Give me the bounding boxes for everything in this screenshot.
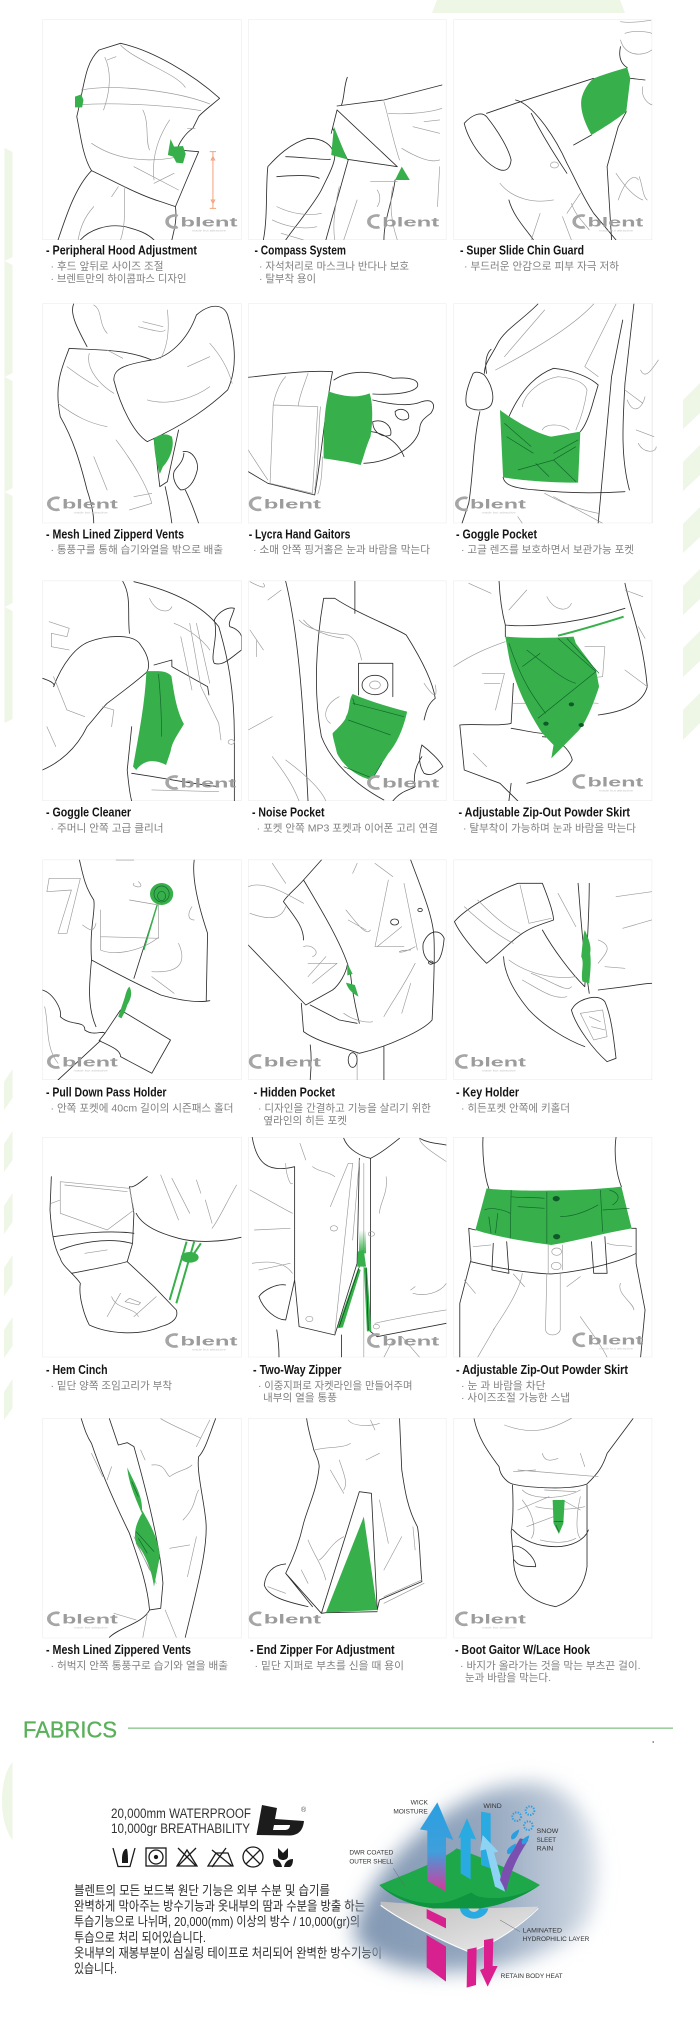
lower magenta bands (427, 1935, 446, 1982)
arrow: wind (481, 1812, 491, 1868)
diagram labels: HYDROPHILIC LAYER (523, 1936, 590, 1943)
panel: Compass System (248, 19, 446, 285)
logo: blent (369, 776, 439, 791)
illustration: hem cinch (42, 1137, 242, 1357)
illustration: noise pocket (248, 581, 446, 801)
description: · 주머니 안쪽 고급 클리너 (50, 822, 164, 834)
diagram labels: SLEET (537, 1837, 556, 1844)
description (460, 1659, 641, 1684)
heading: - Adjustable Zip-Out Powder Skirt (458, 804, 631, 820)
heading: - Mesh Lined Zippered Vents (46, 1642, 191, 1657)
icon: bleach triangle (177, 1848, 197, 1866)
fabrics body text (74, 1883, 382, 1976)
heading: - Hem Cinch (46, 1362, 108, 1377)
arrow: breathability (458, 1818, 476, 1879)
description: · 안쪽 포켓에 40cm 길이의 시즌패스 홀더 (50, 1102, 233, 1114)
logo: blent: blent (180, 215, 238, 230)
description: · 탈부착이 가능하며 눈과 바람을 막는다 (463, 822, 636, 834)
heading: - End Zipper For Adjustment (250, 1642, 395, 1657)
diagram labels: RETAIN BODY HEAT (501, 1973, 563, 1980)
logo: blent (251, 1613, 321, 1627)
logo: blent (457, 1055, 526, 1072)
waterproof spec text (111, 1806, 251, 1836)
panel: Adjustable Zip-Out Powder Skirt (jacket) (454, 581, 652, 834)
icon: crossed circle (243, 1847, 263, 1867)
illustration: goggle cleaner (42, 581, 242, 801)
logo: blent: made but attractive (482, 1069, 516, 1072)
logo: blent: made but attractive (74, 1069, 108, 1072)
logo: blent: made but attractive (599, 1347, 633, 1350)
waterproof spec text: 10,000gr BREATHABILITY (111, 1821, 250, 1836)
logo: blent: blent (587, 1334, 643, 1348)
description: · 포켓 안쪽 MP3 포켓과 이어폰 고리 연결 (257, 822, 438, 834)
logo: blent: blent (470, 498, 526, 512)
illustration: boot gaitor (454, 1418, 652, 1638)
logo: blent: made but attractive (482, 1626, 516, 1629)
description: · 자석처리로 마스크나 반다나 보호 (259, 260, 409, 272)
icon: crossed iron (208, 1848, 233, 1867)
logo: blent: blent (587, 215, 643, 230)
description: · 탈부착 용이 (259, 272, 316, 285)
heading: - Goggle Pocket (456, 526, 538, 542)
diagram labels: LAMINATED (523, 1927, 562, 1934)
logo: blent: made but attractive (74, 1626, 108, 1629)
fabrics body text: 있습니다. (74, 1961, 117, 1976)
icon: b logo: ® (301, 1806, 307, 1814)
logo: blent: blent (62, 498, 118, 512)
icon: hand wash (113, 1848, 135, 1866)
description: · 후드 앞뒤로 사이즈 조절 (50, 260, 164, 272)
waterproof spec text: 20,000mm WATERPROOF (111, 1806, 251, 1821)
heading: - Two-Way Zipper (253, 1362, 342, 1377)
icon: tumble dry (146, 1848, 166, 1866)
illustration: end zipper (248, 1418, 446, 1638)
diagram labels (349, 1800, 590, 1980)
heading: - Mesh Lined Zipperd Vents (46, 526, 184, 542)
diagram labels: SNOW (537, 1828, 559, 1835)
logo: blent (251, 1055, 321, 1070)
illustration: goggle pocket (454, 303, 658, 523)
description: · 바지가 올라가는 것을 막는 부츠끈 걸이. (460, 1659, 641, 1672)
arrow: retain body heat (467, 1938, 498, 1988)
illustration: hidden pocket (248, 860, 446, 1080)
description: 내부의 열을 통풍 (263, 1392, 337, 1404)
logo: blent (49, 498, 118, 514)
arrow: precipitation (500, 1838, 528, 1892)
logo: blent (167, 1334, 238, 1351)
panel: Mesh Lined Zipperd Vents (42, 303, 242, 556)
logo: blent: blent (382, 776, 439, 791)
logo: blent (167, 776, 236, 791)
illustration: pants powder skirt (454, 1137, 652, 1357)
description: · 소매 안쪽 핑거홀은 눈과 바람을 막는다 (253, 543, 430, 556)
logo: blent: blent (382, 1334, 439, 1349)
illustration: hood (42, 19, 242, 240)
panel: Hem Cinch (42, 1137, 242, 1392)
diagram labels: WIND (483, 1803, 502, 1810)
description: · 통풍구를 통해 습기와열을 밖으로 배출 (50, 543, 223, 556)
illustration: hand gaitor (248, 303, 446, 523)
logo: blent: blent (62, 1613, 118, 1627)
description (50, 260, 186, 285)
care icons (113, 1847, 293, 1867)
illustration: chin guard (454, 19, 652, 240)
heading: - Pull Down Pass Holder (46, 1084, 166, 1100)
panel: Pull Down Pass Holder (42, 860, 242, 1114)
logo: blent: blent (180, 1334, 238, 1349)
description: · 이중지퍼로 자켓라인을 만들어주며 (258, 1380, 412, 1392)
logo: blent (574, 215, 643, 232)
panel: Noise Pocket (248, 581, 446, 834)
outer shell (379, 1848, 540, 1908)
logo: blent (574, 1334, 643, 1350)
fabrics body text: 옷내부의 재봉부분이 심실링 테이프로 처리되어 완벽한 방수기능이 (74, 1946, 382, 1960)
fabrics body text: 투습으로 처리 되어있습니다. (74, 1930, 206, 1945)
panel: Adjustable Zip-Out Powder Skirt (pants) (454, 1137, 652, 1404)
logo: blent: blent (587, 775, 643, 790)
logo: blent: made but attractive (482, 511, 516, 514)
description (258, 1380, 412, 1404)
logo: blent (251, 498, 321, 512)
description: · 부드러운 안감으로 피부 자극 저하 (464, 260, 619, 272)
heading: - Key Holder (456, 1084, 519, 1100)
illustration: compass collar (248, 19, 446, 240)
panel: Goggle Pocket (454, 303, 658, 556)
diagram labels: OUTER SHELL (349, 1859, 394, 1866)
panel: Lycra Hand Gaitors (248, 303, 446, 556)
diagram labels: DWR COATED (349, 1850, 394, 1857)
heading: - Adjustable Zip-Out Powder Skirt (456, 1362, 629, 1377)
logo: blent (457, 498, 526, 514)
logo: blent (167, 215, 238, 232)
icon: snow and rain (507, 1806, 534, 1854)
heading: - Goggle Cleaner (46, 804, 131, 820)
description: · 허벅지 안쪽 통풍구로 습기와 열을 배출 (50, 1660, 228, 1672)
description: 옆라인의 히든 포켓 (263, 1115, 347, 1127)
panel: Super Slide Chin Guard (454, 19, 652, 272)
logo: blent (49, 1613, 118, 1629)
panel: Boot Gaitor W/Lace Hook (454, 1418, 652, 1684)
logo: blent: blent (62, 1055, 118, 1070)
illustration: underarm vent (42, 303, 242, 523)
logo: blent: blent (470, 1613, 526, 1627)
description: · 사이즈조절 가능한 스냅 (461, 1391, 570, 1404)
description: · 고글 렌즈를 보호하면서 보관가능 포켓 (461, 543, 634, 556)
logo: blent: made but attractive (74, 511, 108, 514)
logo: blent (574, 775, 643, 792)
fabrics body text: 완벽하게 막아주는 방수기능과 옷내부의 땀과 수분을 방출 하는 (74, 1898, 365, 1914)
description: 눈과 바람을 막는다. (465, 1671, 551, 1684)
logo: blent: made but attractive (192, 229, 226, 232)
description (461, 1379, 570, 1404)
logo: blent: made but attractive (599, 229, 633, 232)
divider line (128, 1728, 673, 1729)
panel: Goggle Cleaner (42, 581, 242, 834)
icon: b logo (256, 1805, 307, 1836)
illustration: two-way zipper (248, 1137, 446, 1357)
description (258, 1102, 431, 1127)
fabric layers diagram (349, 1783, 596, 1988)
arrow: wick moisture (420, 1802, 453, 1892)
logo: blent (369, 1334, 439, 1349)
diagram labels: WICK (411, 1800, 429, 1807)
illustration: key holder (454, 860, 652, 1080)
icon: tulip (273, 1848, 293, 1867)
diagram labels: RAIN (537, 1846, 554, 1853)
heading: - Lycra Hand Gaitors (249, 526, 350, 542)
description: · 밑단 지퍼로 부츠를 신을 때 용이 (254, 1660, 404, 1672)
description: · 밑단 양쪽 조임고리가 부착 (50, 1379, 172, 1392)
heading: - Peripheral Hood Adjustment (46, 242, 198, 258)
illustration: zip-out powder skirt (454, 581, 652, 801)
heading: - Boot Gaitor W/Lace Hook (455, 1642, 591, 1657)
logo: blent: blent (264, 1613, 321, 1627)
description (259, 260, 409, 285)
illustration: leg vent (42, 1418, 242, 1638)
logo: blent (49, 1055, 118, 1072)
heading: - Super Slide Chin Guard (460, 242, 584, 258)
diagram labels: MOISTURE (393, 1808, 428, 1815)
laminated layer (381, 1902, 538, 1952)
fabrics body text: 블렌트의 모든 보드복 원단 기능은 외부 수분 및 습기를 (74, 1883, 330, 1898)
panel: Hidden Pocket (248, 860, 446, 1127)
logo: blent: blent (264, 1055, 321, 1070)
logo: blent: blent (180, 776, 236, 791)
leader lines (393, 1868, 520, 1932)
panel: Key Holder (454, 860, 652, 1114)
panel: Peripheral Hood Adjustment (42, 19, 242, 285)
description: · 브렌트만의 하이콤파스 디자인 (50, 272, 186, 285)
logo: blent: blent (382, 215, 439, 230)
logo: blent (457, 1613, 526, 1629)
description: · 눈 과 바람을 차단 (461, 1379, 546, 1392)
heading: - Hidden Pocket (254, 1084, 336, 1100)
logo: blent: blent (264, 498, 321, 512)
panel: End Zipper For Adjustment (248, 1418, 446, 1672)
panel: Two-Way Zipper (248, 1137, 446, 1404)
heading: FABRICS: FABRICS (23, 1716, 117, 1742)
logo: blent (369, 215, 439, 230)
description: · 히든포켓 안쪽에 키홀더 (461, 1102, 570, 1114)
cyan loop (460, 1908, 488, 1919)
fabrics body text: 투습기능으로 나뉘며, 20,000(mm) 이상의 방수 / 10,000(gr)의 (74, 1914, 360, 1929)
logo: blent: made but attractive (599, 789, 633, 792)
illustration: pass holder (42, 860, 242, 1080)
logo: blent: blent (470, 1055, 526, 1070)
panel: Mesh Lined Zippered Vents (42, 1418, 242, 1672)
logo: blent: made but attractive (192, 1348, 226, 1351)
description: · 디자인을 간결하고 기능을 살리기 위한 (258, 1102, 431, 1114)
heading: - Compass System (254, 242, 346, 258)
heading: - Noise Pocket (252, 804, 325, 820)
